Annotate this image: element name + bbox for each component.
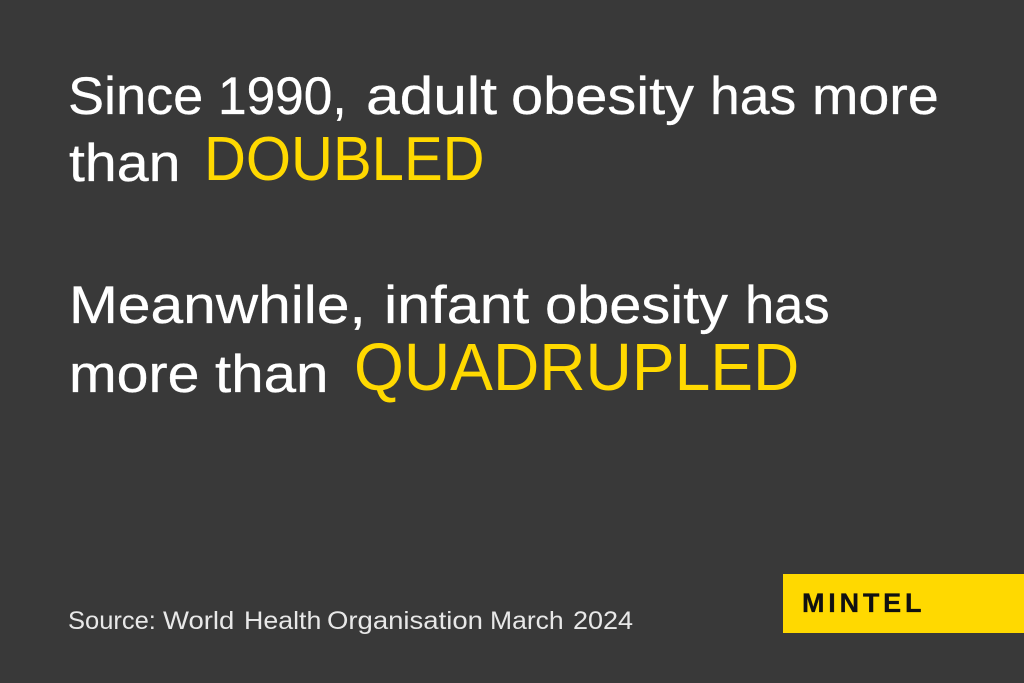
headline: adult obesity line 1 <box>68 67 938 126</box>
headline: adult obesity line 1: adult <box>366 67 497 126</box>
headline: adult obesity line 1: 1990, <box>218 67 347 126</box>
highlight: doubled: DOUBLED <box>204 124 485 194</box>
headline: adult obesity line 1: Since <box>68 67 203 126</box>
headline: infant obesity line 2: more <box>68 345 199 404</box>
source note: World <box>163 607 234 635</box>
logo: Mintel <box>783 574 1024 633</box>
source note <box>68 607 633 635</box>
source note: March <box>490 607 564 635</box>
logo: Mintel: MINTEL <box>802 588 925 618</box>
source note: 2024 <box>573 607 633 635</box>
headline: infant obesity line 1 <box>69 276 829 335</box>
headline: infant obesity line 2 <box>68 345 328 404</box>
source note: Health <box>244 607 321 635</box>
headline: adult obesity line 2: than <box>69 134 180 193</box>
headline: infant obesity line 1: has <box>744 276 829 335</box>
headline: infant obesity line 1: obesity <box>545 276 728 335</box>
source note: Source: <box>68 607 156 635</box>
highlight: quadrupled: QUADRUPLED <box>354 330 799 405</box>
headline: adult obesity line 1: has <box>710 67 796 126</box>
headline: adult obesity line 1: more <box>812 67 938 126</box>
headline: infant obesity line 1: infant <box>384 276 529 335</box>
headline: adult obesity line 1: obesity <box>511 67 694 126</box>
source note: Organisation <box>327 607 483 635</box>
headline: infant obesity line 2: than <box>215 345 328 404</box>
headline: infant obesity line 1: Meanwhile, <box>69 276 366 335</box>
